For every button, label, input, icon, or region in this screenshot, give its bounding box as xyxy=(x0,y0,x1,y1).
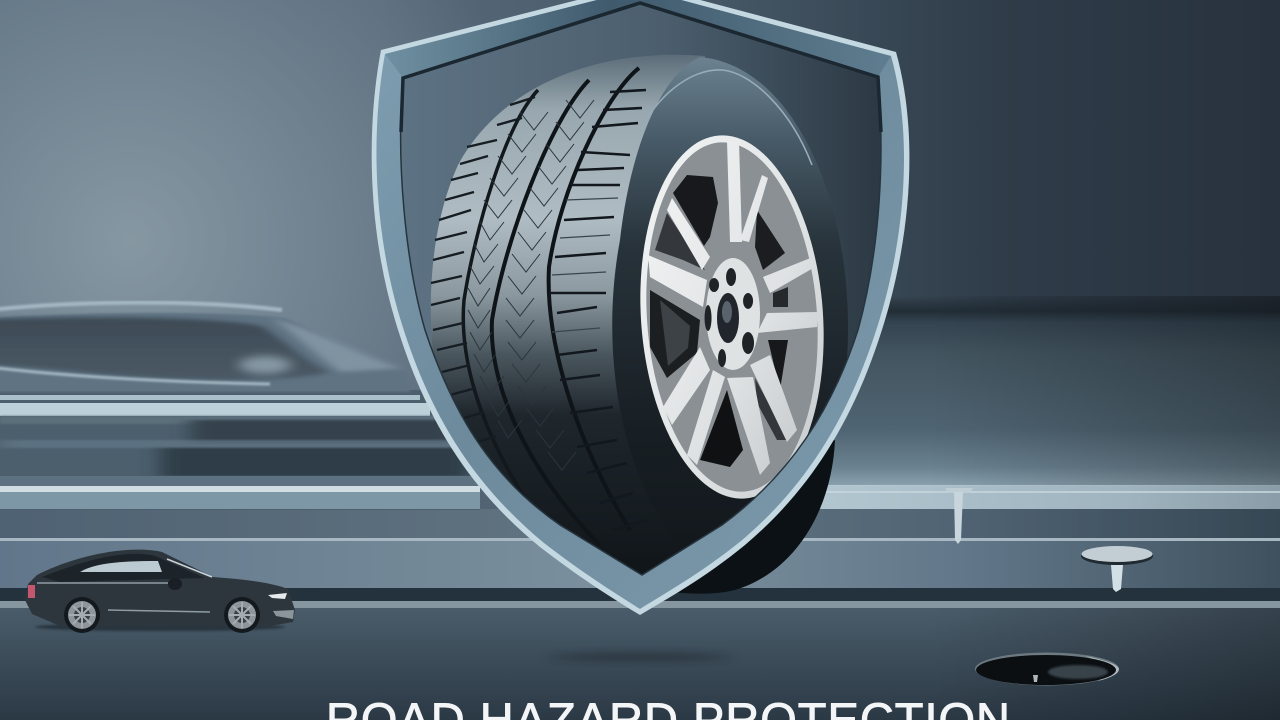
wheels xyxy=(64,597,260,633)
parked sedan xyxy=(25,550,295,633)
side mirror xyxy=(168,578,182,590)
sidewall xyxy=(612,57,848,508)
sidewall highlight xyxy=(640,70,812,165)
car body xyxy=(25,550,295,626)
shield with tire xyxy=(372,0,909,615)
car windows xyxy=(42,554,205,582)
hub xyxy=(706,258,760,370)
tire bottom behind shield xyxy=(670,440,835,594)
motion-blurred car xyxy=(0,303,480,510)
icon: upright nail xyxy=(945,488,973,544)
shield inner bevel xyxy=(401,3,881,575)
icon: pothole xyxy=(975,652,1119,686)
headlight xyxy=(268,593,287,599)
ground shadow under shield xyxy=(550,652,730,662)
rim xyxy=(640,135,824,499)
tail light xyxy=(28,585,35,598)
shield frame xyxy=(372,0,909,615)
alloy wheel xyxy=(640,135,824,499)
road surface xyxy=(0,509,1280,720)
car shadow xyxy=(35,623,285,631)
tread xyxy=(430,54,705,574)
spokes xyxy=(648,141,818,475)
icon: large-head nail xyxy=(1081,546,1153,592)
background sky and horizon xyxy=(0,0,1280,520)
tire xyxy=(431,55,848,600)
shield interior xyxy=(401,3,881,575)
